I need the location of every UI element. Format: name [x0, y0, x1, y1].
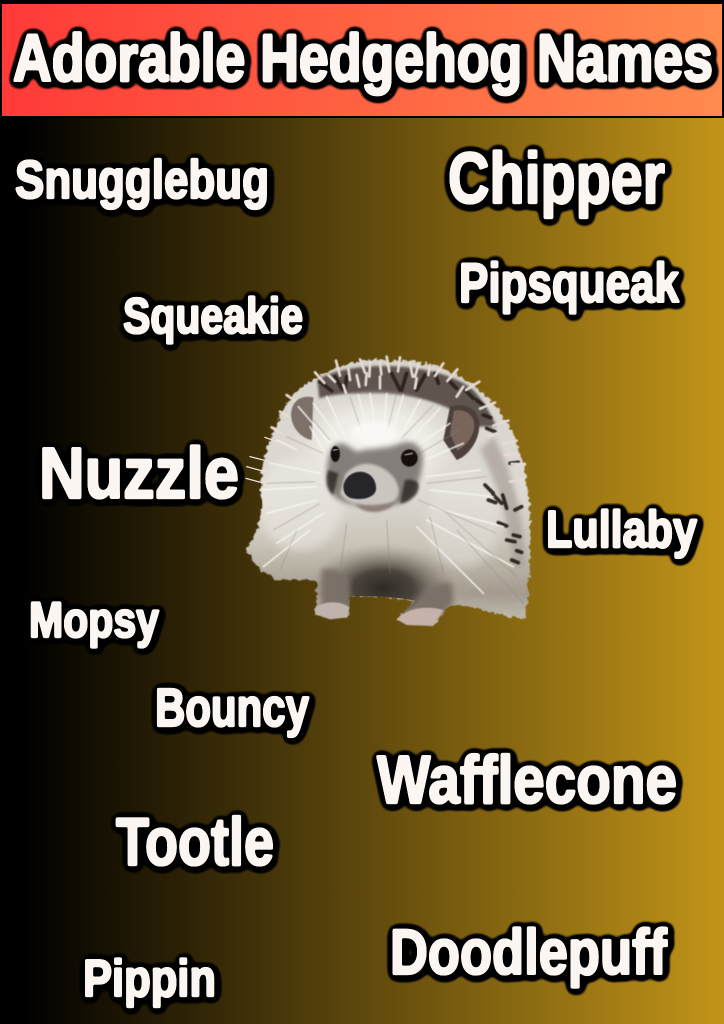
body silhouette: [246, 360, 530, 625]
right ear outer: [443, 405, 479, 460]
name: Mopsy: Mopsy: [29, 592, 159, 648]
dark belly: [316, 547, 448, 618]
right ear inner: [450, 410, 474, 451]
name: Doodlepuff: Doodlepuff: [390, 916, 668, 988]
nose: [343, 472, 376, 499]
name: Tootle: Tootle: [116, 804, 274, 880]
chin: [355, 502, 395, 512]
right eye: [401, 449, 418, 467]
name: Squeakie: Squeakie: [123, 288, 303, 344]
dark cheek marks: [327, 470, 419, 503]
brow white patch: [350, 421, 397, 444]
eye highlights: [333, 449, 412, 455]
name: Lullaby: Lullaby: [546, 501, 697, 559]
quill band: top: [317, 366, 497, 427]
cheek fur left: [257, 457, 343, 550]
grey fur strands: [267, 393, 523, 603]
stray left whiskers: [246, 437, 278, 483]
face fur: [306, 390, 446, 480]
right leg: [417, 582, 453, 622]
icon: hedgehog illustration: [246, 357, 530, 633]
right foot: [397, 608, 443, 626]
dark quill marks: [320, 373, 522, 563]
quill band: right flank: [480, 437, 525, 567]
left eye: [331, 446, 340, 462]
cheek fur right: [428, 498, 499, 569]
left leg: [322, 569, 349, 612]
radial white hairs: [260, 393, 513, 593]
name: Nuzzle: Nuzzle: [39, 434, 239, 514]
snout: [340, 464, 399, 507]
title banner: [1, 3, 723, 117]
name: Snugglebug: Snugglebug: [15, 150, 269, 210]
left ear: [291, 397, 313, 440]
pale quill tips: [272, 357, 525, 482]
name: Pippin: Pippin: [83, 950, 216, 1008]
name: Chipper: Chipper: [448, 139, 665, 219]
name: Bouncy: Bouncy: [155, 678, 309, 738]
soft fur shading clipped to body: [257, 366, 525, 633]
left foot: [314, 602, 349, 619]
grey mask: [327, 442, 423, 506]
